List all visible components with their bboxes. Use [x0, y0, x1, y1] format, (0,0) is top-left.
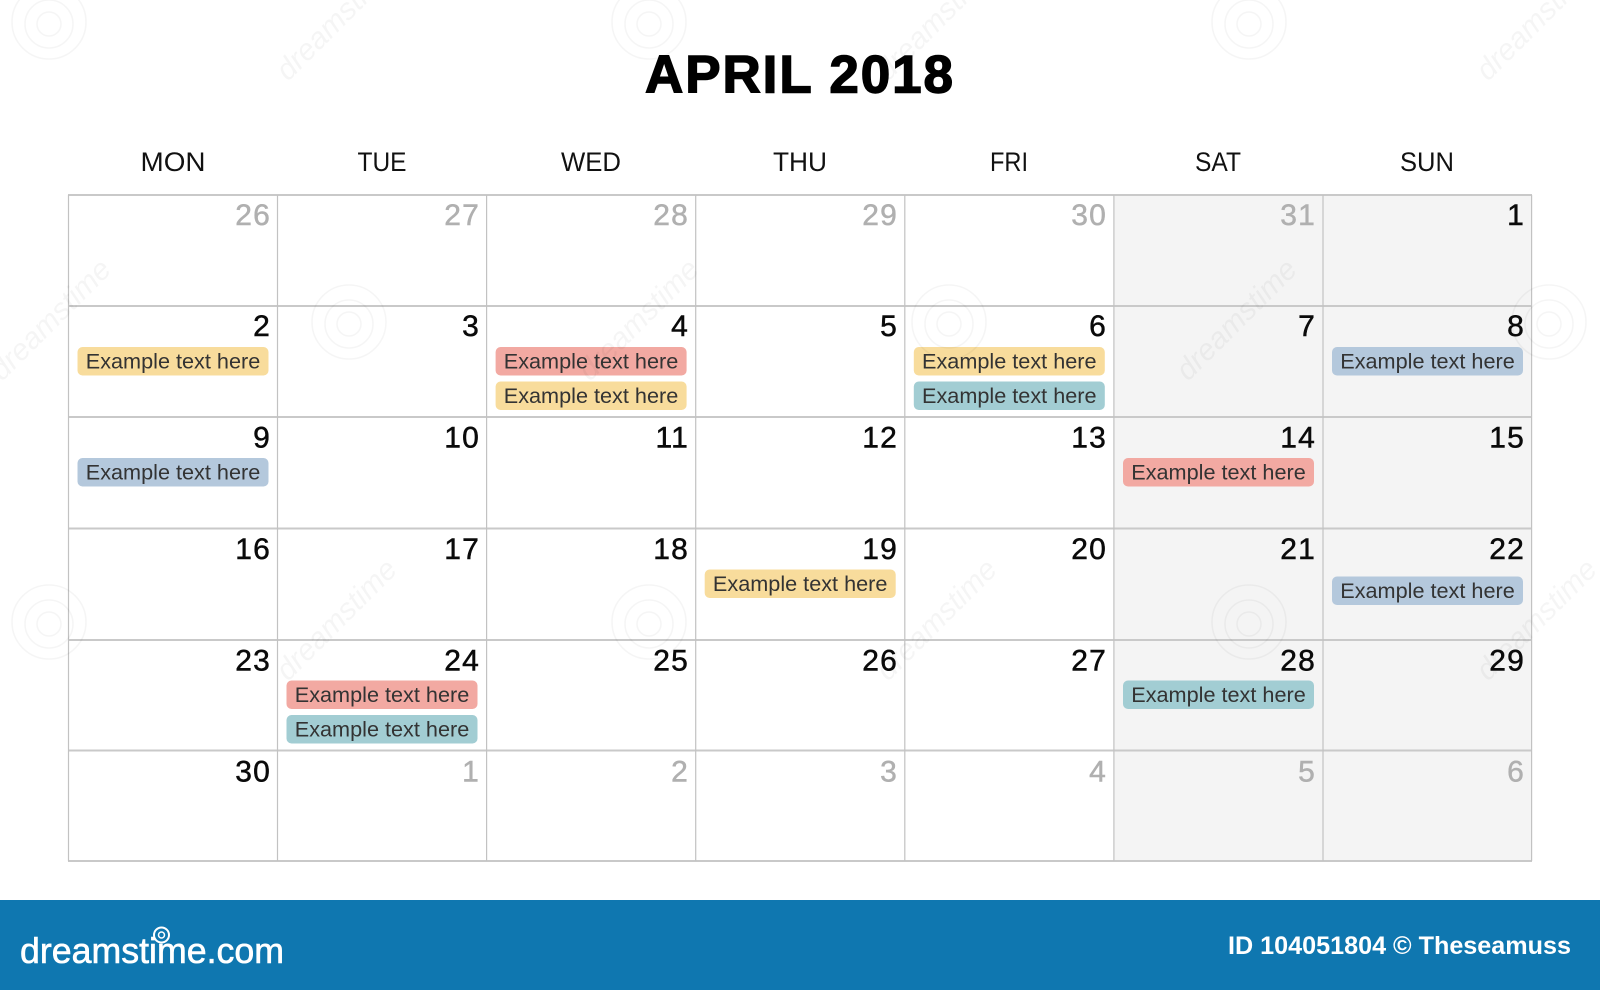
footer band: [0, 900, 1600, 990]
date numbers: 19: [862, 533, 898, 566]
tag: April 24 teal: Example text here: [295, 718, 469, 742]
weekday headers: MON: [140, 147, 206, 177]
date numbers: 28: [653, 199, 689, 232]
date numbers: 3: [880, 756, 898, 788]
date numbers: 31: [1280, 199, 1316, 232]
date numbers: 24: [444, 644, 480, 678]
date numbers: 3: [462, 310, 480, 343]
date numbers: 30: [235, 756, 271, 788]
logo: dreamstime.com: dreamstime.com: [20, 930, 284, 971]
tag: April 28: Example text here: [1131, 684, 1306, 707]
date numbers: 30: [1071, 199, 1107, 232]
date numbers: 29: [1489, 644, 1525, 678]
date numbers: 6: [1089, 310, 1107, 343]
date numbers: 29: [862, 199, 898, 232]
date numbers: [235, 199, 1525, 788]
date numbers: 8: [1507, 310, 1525, 343]
date numbers: 17: [444, 533, 480, 566]
date numbers: 2: [253, 310, 271, 343]
watermark: dreamstime: [270, 553, 404, 687]
tag: April 6 teal: Example text here: [922, 385, 1097, 408]
date numbers: 22: [1489, 533, 1525, 566]
date numbers: 27: [1071, 644, 1107, 678]
date numbers: 15: [1489, 422, 1525, 454]
date numbers: 9: [253, 422, 271, 454]
watermark: [0, 0, 1600, 687]
date numbers: 12: [862, 422, 898, 454]
date numbers: 4: [671, 310, 689, 343]
calendar grid: [68, 195, 1532, 861]
date numbers: 1: [462, 756, 480, 788]
tag: April 19: Example text here: [713, 573, 887, 596]
date numbers: 27: [444, 199, 480, 232]
title: APRIL 2018: [645, 46, 953, 104]
date numbers: 4: [1089, 756, 1107, 788]
date numbers: 23: [235, 644, 271, 678]
date numbers: 7: [1298, 310, 1316, 343]
date numbers: 20: [1071, 533, 1107, 566]
weekday headers: FRI: [990, 147, 1028, 177]
date numbers: 14: [1280, 422, 1316, 454]
tag: April 9: Example text here: [86, 462, 260, 484]
weekday headers: SUN: [1400, 147, 1454, 177]
tag: April 2: Example text here: [86, 350, 260, 374]
date numbers: 26: [235, 199, 271, 232]
tag: April 8: Example text here: [1340, 350, 1515, 374]
date numbers: 11: [655, 422, 689, 454]
tag: April 24 red: Example text here: [295, 684, 469, 707]
date numbers: 6: [1507, 756, 1525, 788]
tag: April 14: Example text here: [1131, 462, 1306, 484]
tag: April 6 yellow: Example text here: [922, 350, 1097, 374]
weekday headers: WED: [561, 147, 621, 177]
date numbers: 25: [653, 644, 689, 678]
date numbers: 21: [1280, 533, 1316, 566]
weekday headers: [140, 147, 1454, 177]
date numbers: 5: [1298, 756, 1316, 788]
watermark: dreamstime: [870, 553, 1004, 687]
weekday headers: THU: [773, 147, 827, 177]
watermark: dreamstime: [572, 253, 706, 387]
date numbers: 13: [1071, 422, 1107, 454]
tag: April 4 red: Example text here: [504, 350, 678, 374]
image id and credit: ID 104051804 © Theseamuss: [1228, 932, 1571, 960]
date numbers: 26: [862, 644, 898, 678]
date numbers: 16: [235, 533, 271, 566]
date numbers: 1: [1507, 199, 1525, 232]
event tags: [78, 347, 1523, 744]
weekday headers: SAT: [1195, 147, 1241, 177]
date numbers: 28: [1280, 644, 1316, 678]
watermark: dreamstime: [1470, 553, 1600, 687]
tag: April 4 yellow: Example text here: [504, 385, 678, 408]
date numbers: 2: [671, 756, 689, 788]
watermark: dreamstime: [1170, 253, 1304, 387]
date numbers: 5: [880, 310, 898, 343]
tag: April 22: Example text here: [1340, 580, 1515, 603]
weekday headers: TUE: [358, 147, 406, 177]
date numbers: 18: [653, 533, 689, 566]
date numbers: 10: [444, 422, 480, 454]
